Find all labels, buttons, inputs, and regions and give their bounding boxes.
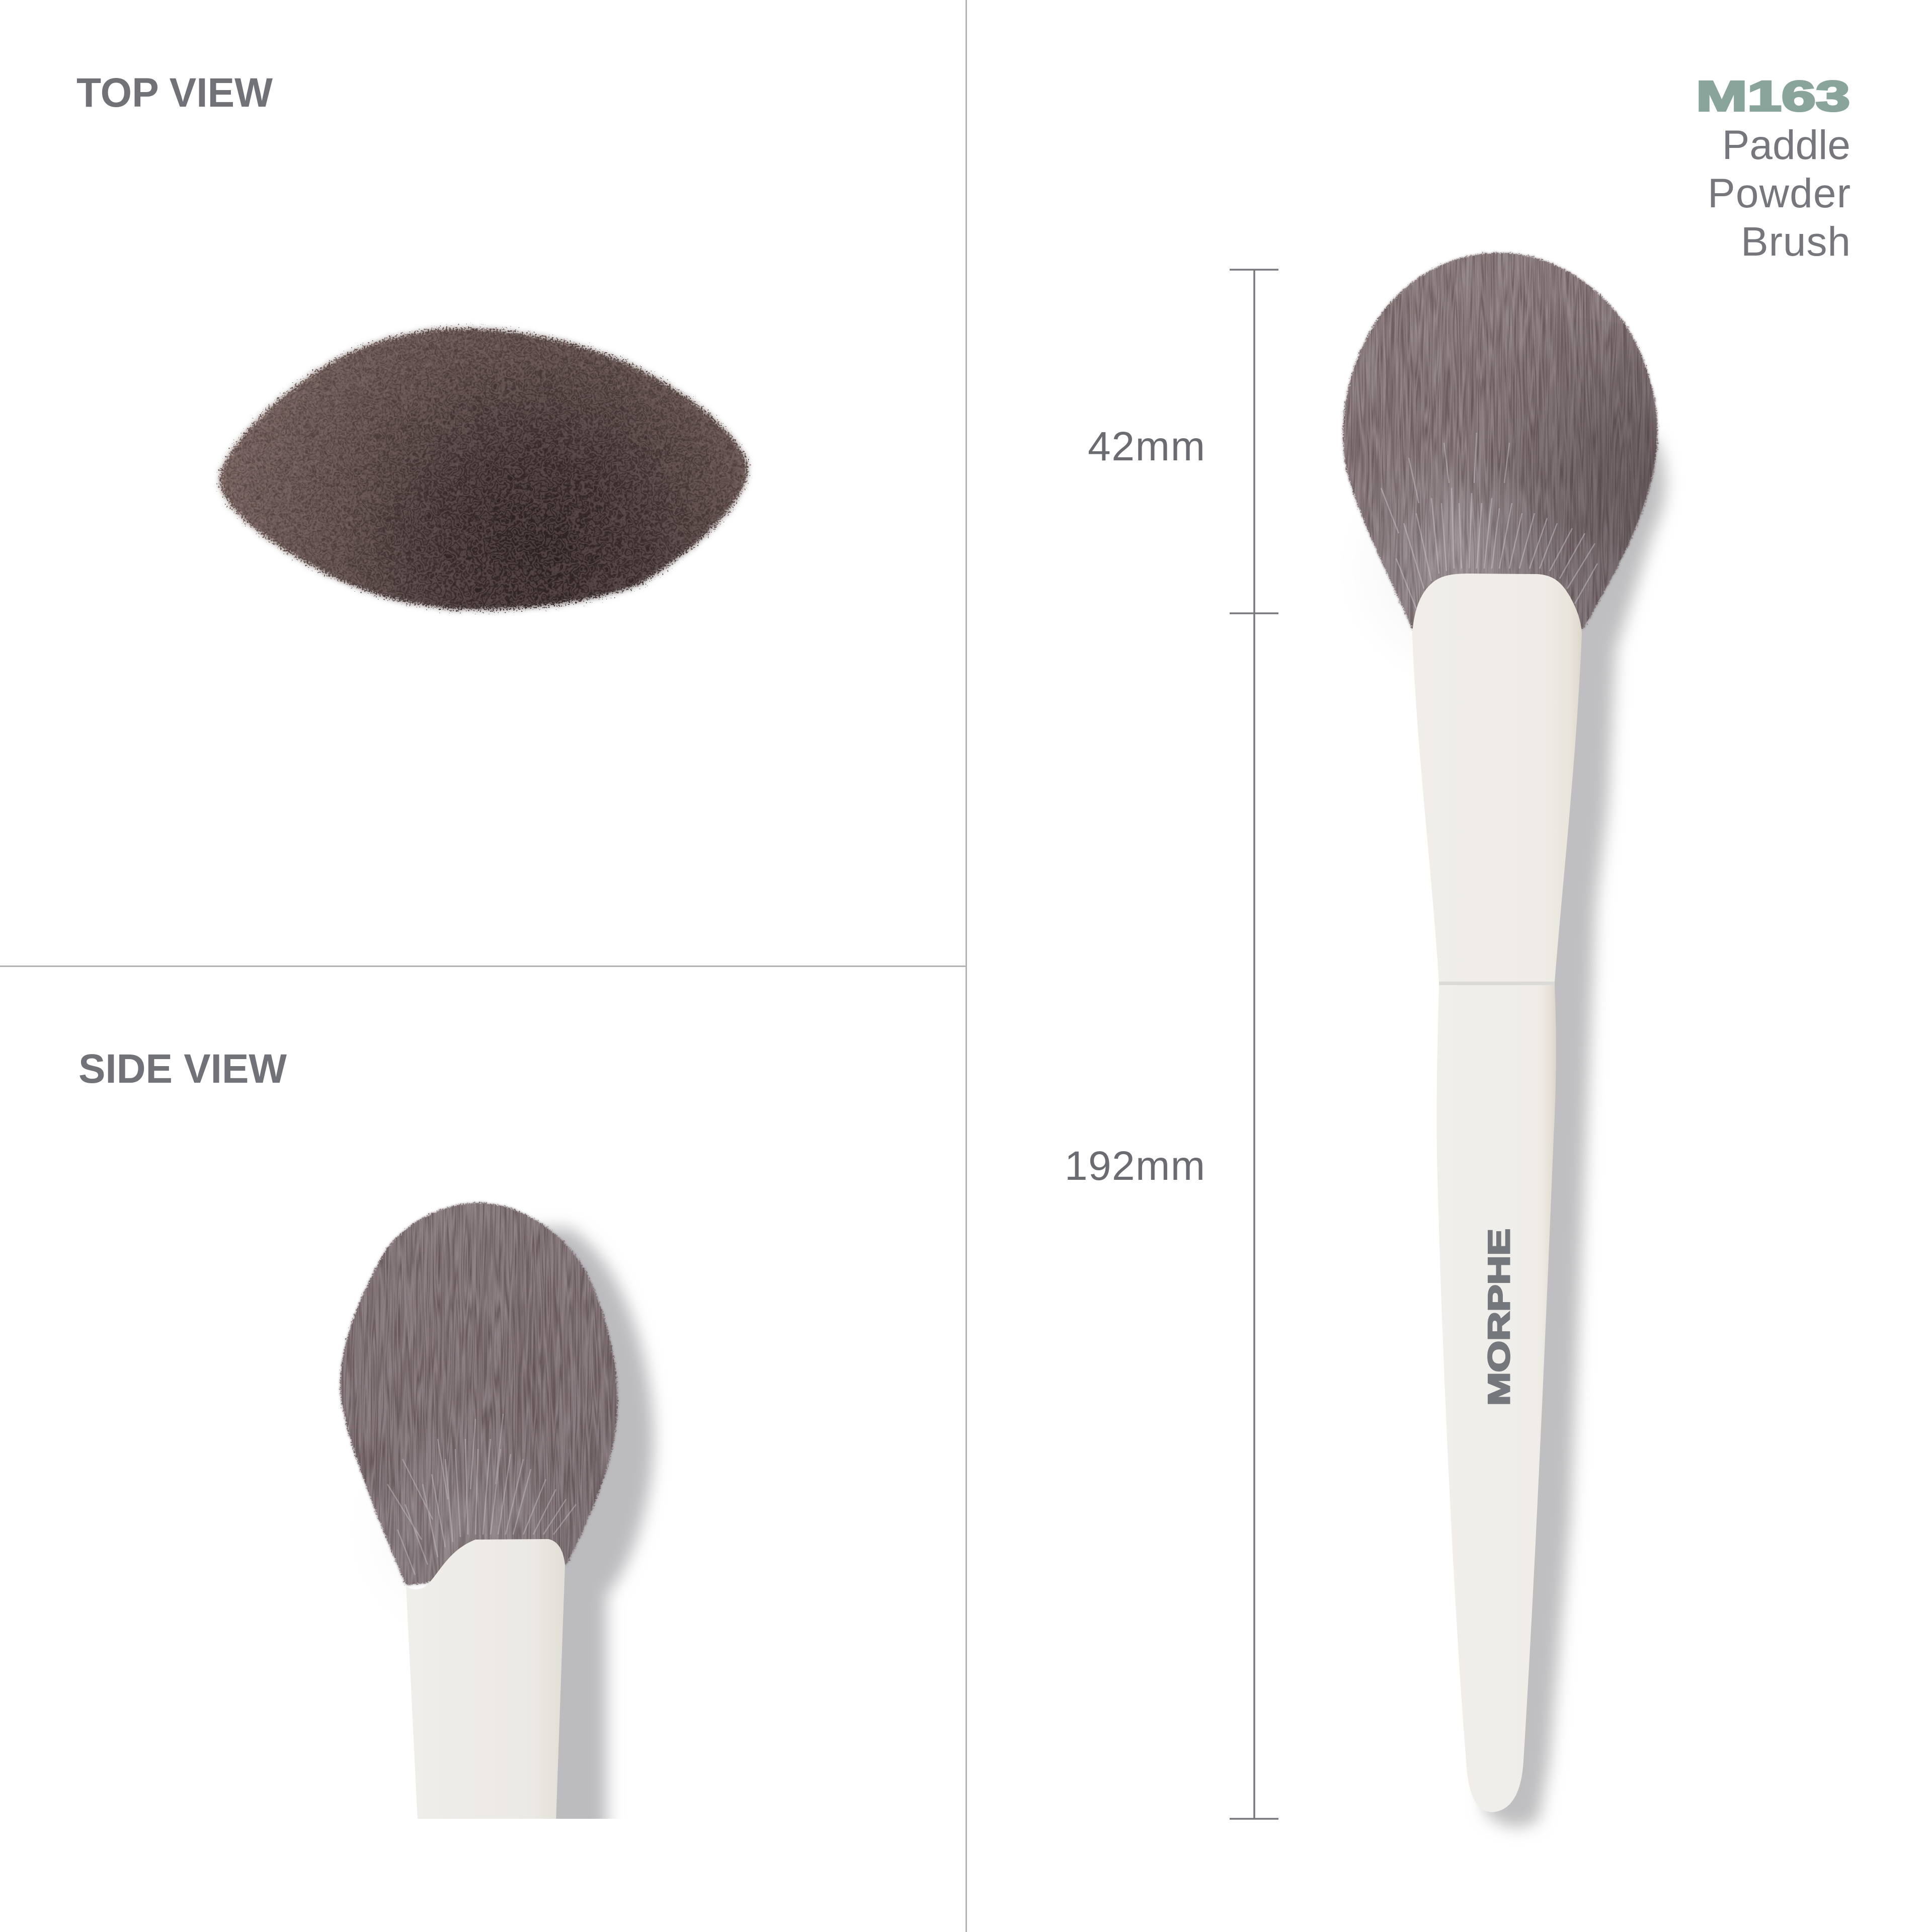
panel: side view bbox=[78, 1046, 654, 1862]
product name lines: Brush bbox=[1741, 219, 1850, 265]
bristles: base highlight bbox=[1338, 448, 1580, 689]
shadow: full brush bbox=[1484, 438, 1666, 1827]
bristles: darker right side bbox=[1484, 302, 1656, 629]
handle logo: MORPHE bbox=[1482, 1229, 1516, 1406]
bristles: full brush bbox=[1343, 253, 1657, 629]
ferrule: side brush bbox=[406, 1539, 565, 1821]
bristles: base highlight bbox=[385, 1450, 541, 1585]
title block: product name bbox=[1696, 72, 1850, 265]
handle bbox=[1436, 985, 1556, 1812]
heading: top view: TOP VIEW bbox=[76, 70, 273, 116]
junction line bbox=[1439, 982, 1555, 985]
dimension label: head length: 42mm bbox=[1088, 424, 1205, 469]
image: full brush bbox=[1338, 253, 1666, 1827]
panel: full brush with dimensions bbox=[1065, 72, 1850, 1827]
image: brush head from above bbox=[220, 329, 747, 609]
dimension ruler bbox=[1230, 270, 1278, 1819]
product name lines bbox=[1708, 122, 1850, 265]
bristles: light hair strands bbox=[387, 1414, 576, 1575]
bristles: light hair strands bbox=[1381, 433, 1597, 609]
panel divider: horizontal bbox=[0, 965, 966, 967]
heading: side view: SIDE VIEW bbox=[78, 1046, 287, 1092]
dimension label: total length: 192mm bbox=[1065, 1143, 1205, 1189]
ferrule: full brush bbox=[1412, 574, 1582, 982]
product name lines: Powder bbox=[1708, 171, 1850, 216]
shadow: side brush bbox=[533, 1228, 654, 1862]
product name lines: Paddle bbox=[1722, 122, 1850, 168]
bristles: side brush bbox=[341, 1203, 617, 1585]
panel divider: vertical bbox=[965, 0, 967, 1932]
panel: top view bbox=[76, 70, 747, 609]
product code: M163 bbox=[1696, 72, 1850, 120]
image: brush head from the side bbox=[341, 1203, 654, 1862]
